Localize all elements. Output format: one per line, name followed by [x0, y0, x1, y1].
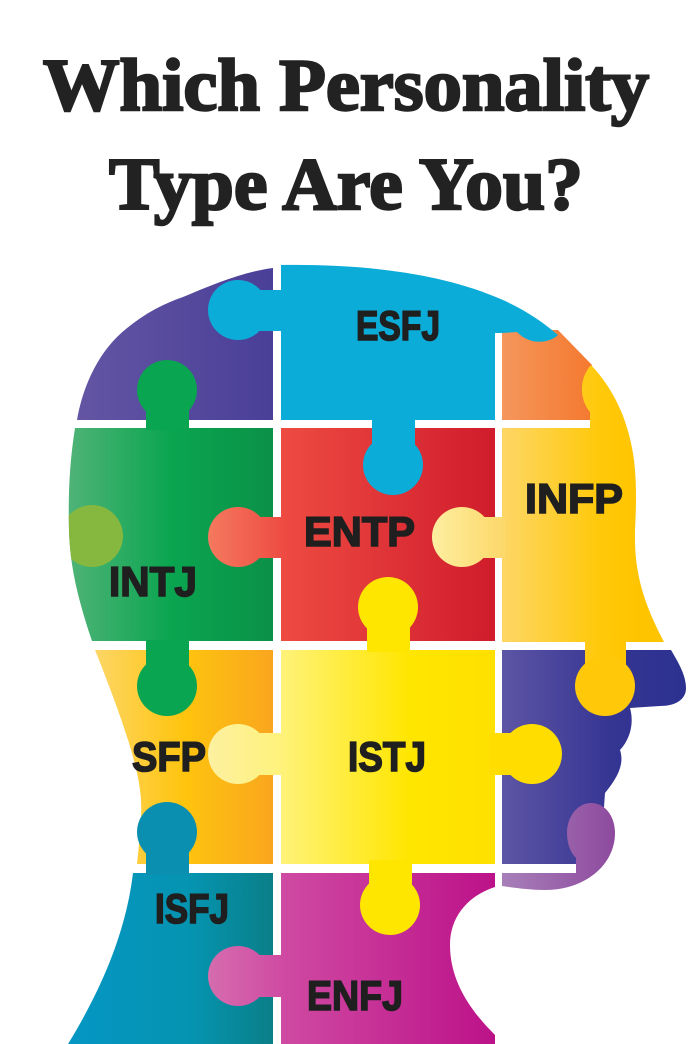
label: SFP: SFP	[132, 733, 206, 780]
label: ISTJ: ISTJ	[348, 733, 426, 780]
label: INTJ: INTJ	[109, 558, 197, 605]
piece: yellow INFP	[432, 365, 664, 716]
icon: lime tab	[68, 505, 123, 567]
piece: magenta ENFJ	[208, 873, 495, 1044]
label: ENFJ: ENFJ	[307, 972, 403, 1019]
piece: red ENTP	[208, 428, 495, 641]
label: INFP: INFP	[525, 475, 623, 522]
piece: purple crown	[77, 268, 273, 420]
puzzle head	[61, 265, 686, 1044]
piece: purple chin	[502, 803, 615, 890]
title	[43, 45, 649, 226]
piece: green INTJ	[61, 360, 273, 716]
piece: blue ESFJ	[208, 265, 558, 495]
piece: SFP	[95, 650, 273, 864]
label: ENTP: ENTP	[304, 508, 415, 555]
title: Which Personality	[43, 45, 649, 127]
piece: navy nose	[502, 650, 686, 864]
piece: yellow ISTJ	[208, 577, 562, 935]
label: ISFJ: ISFJ	[155, 885, 229, 932]
piece: teal ISFJ	[68, 802, 273, 1044]
piece: orange	[502, 330, 592, 420]
label: ESFJ: ESFJ	[356, 302, 440, 349]
title: Type Are You?	[109, 144, 583, 226]
